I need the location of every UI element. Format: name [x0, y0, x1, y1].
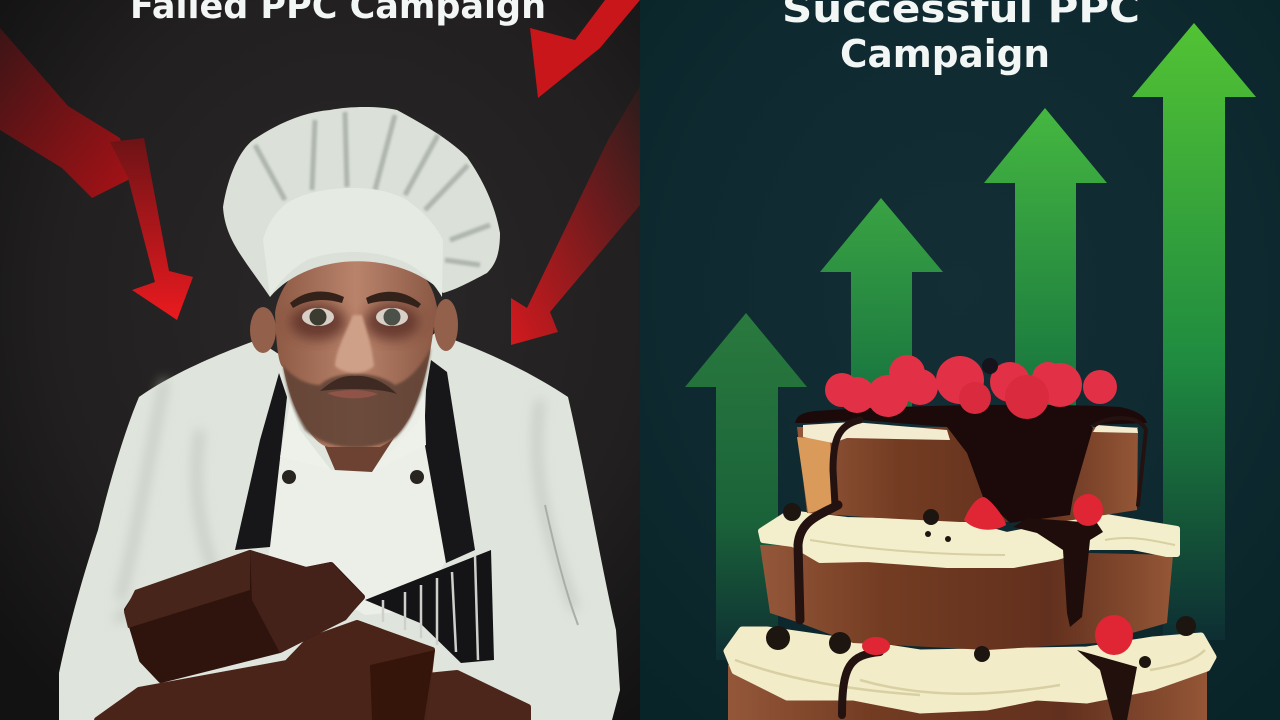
cut slice [797, 437, 835, 513]
ganache middle pool [1013, 518, 1103, 627]
collar [280, 390, 426, 472]
middle tier sponge [760, 545, 1173, 650]
eyebrows [290, 291, 421, 308]
apron straps [235, 360, 475, 563]
arrow: red arrow right [511, 86, 640, 345]
coat folds [115, 380, 575, 620]
middle cream swirls [810, 538, 1175, 555]
dark berry [982, 358, 998, 374]
right chunk [427, 673, 528, 720]
top block crumb [250, 550, 365, 653]
neck [305, 400, 412, 472]
raspberries on top [825, 355, 1117, 419]
ganache bottom pool [1077, 650, 1137, 720]
top block crust [124, 550, 250, 628]
hat pleats [255, 112, 490, 265]
moustache and lips [320, 376, 397, 398]
top cream [803, 422, 1138, 443]
ganache top and centre [795, 405, 1147, 523]
chef figure [59, 107, 620, 720]
panel: failed campaign [0, 0, 640, 720]
arrow: red arrow upper left [0, 28, 193, 320]
hat band [263, 188, 443, 297]
heading: successful campaign [782, 0, 1140, 76]
bottom cream swirls [735, 650, 1205, 695]
arrow: green growth 3 [984, 108, 1107, 420]
arrow: green growth 1 [685, 313, 807, 660]
nose [335, 315, 374, 373]
lower slab cut side [370, 650, 435, 720]
bottom tier sponge [728, 665, 1207, 720]
arrow: green growth 4 [1132, 23, 1256, 640]
failed brownie cake [97, 550, 528, 720]
arrow: red arrow top right [530, 0, 640, 98]
panel: successful campaign [640, 0, 1280, 720]
ears [250, 299, 458, 353]
coat buttons [282, 470, 424, 484]
shirt front [268, 395, 446, 615]
side raspberries [862, 494, 1133, 655]
ganache drips [798, 418, 1146, 715]
beard stubble [283, 348, 431, 448]
chocolate crumbs [766, 503, 1196, 668]
face [275, 253, 437, 447]
heading: successful campaign: Campaign [840, 32, 1050, 76]
chef coat [59, 333, 620, 720]
lower slab [97, 623, 432, 720]
arrow: green growth 2 [820, 198, 943, 420]
coat seam [545, 505, 578, 625]
chocolate ganache [795, 405, 1147, 720]
middle tier cream [761, 513, 1177, 565]
chef hat [223, 107, 500, 297]
eyes [302, 308, 408, 326]
top block [127, 553, 362, 680]
apron stripes [383, 556, 478, 660]
striped apron bib [365, 550, 494, 663]
layered cake [727, 355, 1213, 720]
eye sockets [290, 304, 419, 340]
bottom tier cream [727, 630, 1213, 710]
top tier sponge [797, 427, 1138, 522]
hat crown [223, 107, 500, 297]
